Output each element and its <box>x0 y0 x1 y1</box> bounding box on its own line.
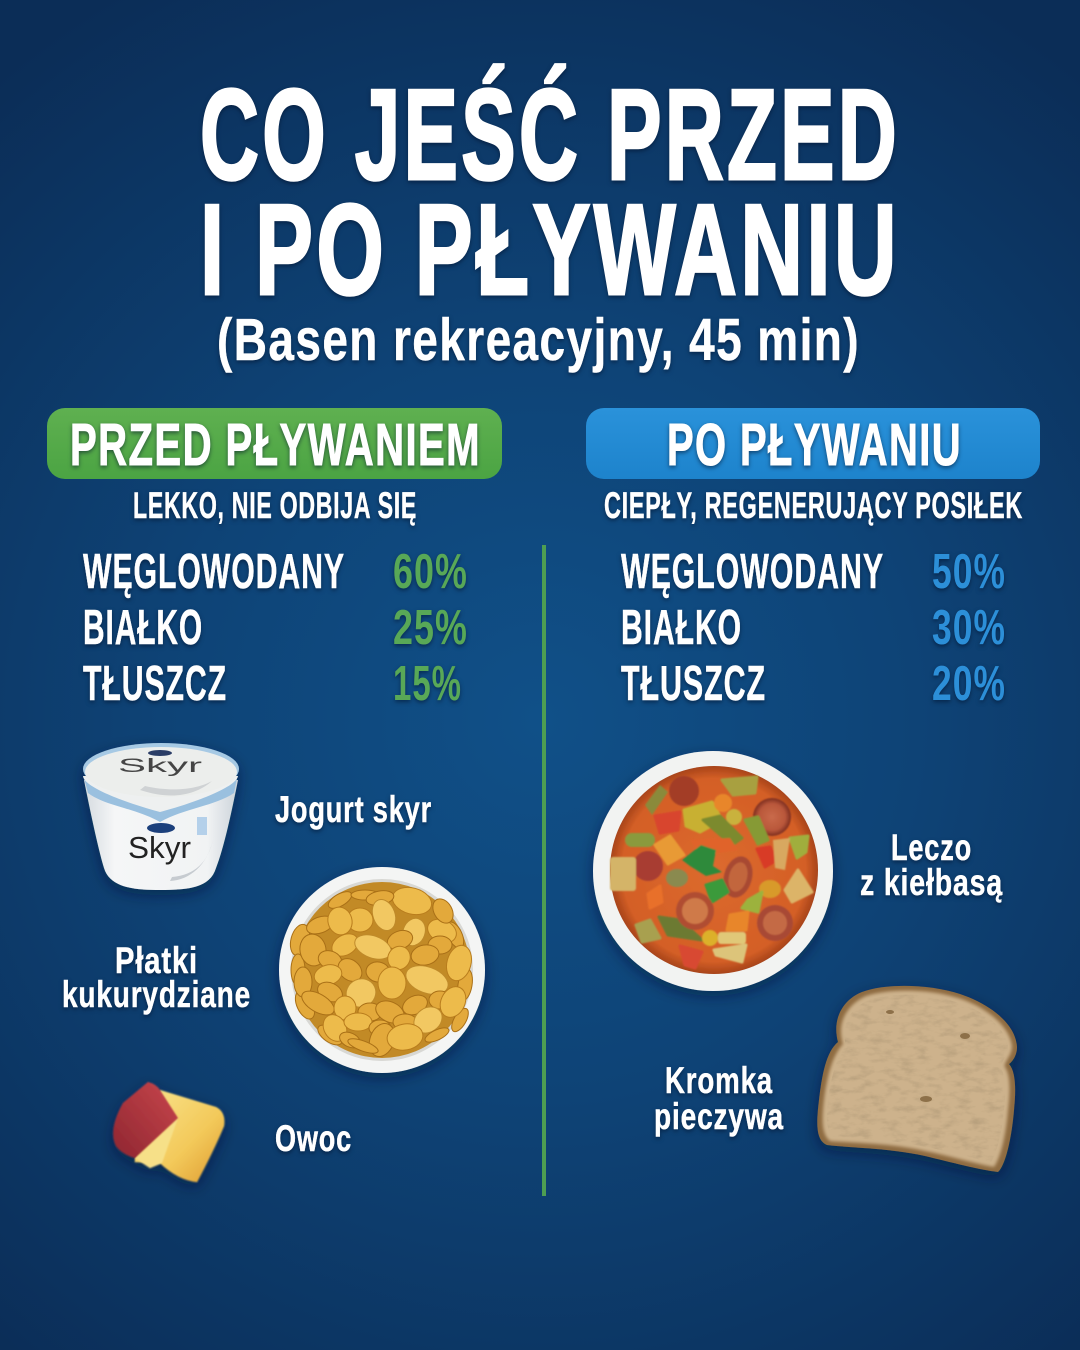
macros: before: BIAŁKO <box>83 601 203 655</box>
label: płatki kukurydziane <box>62 940 251 1015</box>
macros: after: BIAŁKO <box>621 601 742 655</box>
macros: after: 20% <box>932 657 1006 711</box>
subtitle: (Basen rekreacyjny, 45 min) <box>217 307 860 373</box>
macros: before <box>83 545 468 711</box>
title <box>200 63 900 322</box>
label: leczo z kiełbasą: z kiełbasą <box>860 862 1003 903</box>
label: płatki kukurydziane: kukurydziane <box>62 974 251 1015</box>
macros: before: 60% <box>393 545 468 599</box>
icon: bread slice <box>817 986 1017 1172</box>
label: płatki kukurydziane: Płatki <box>115 940 198 981</box>
label: kromka pieczywa: pieczywa <box>654 1096 784 1137</box>
icon: skyr yogurt: Skyr <box>118 756 203 777</box>
label: jogurt skyr: Jogurt skyr <box>275 789 432 830</box>
label: owoc: Owoc <box>275 1118 352 1159</box>
macros: after: TŁUSZCZ <box>621 657 766 711</box>
subheading: before: LEKKO, NIE ODBIJA SIĘ <box>133 485 417 526</box>
divider <box>542 545 546 1196</box>
label: kromka pieczywa <box>654 1060 784 1137</box>
icon: fruit <box>113 1082 224 1182</box>
macros: before: 25% <box>393 601 468 655</box>
icon: skyr yogurt: Skyr <box>128 830 191 865</box>
macros: before: TŁUSZCZ <box>83 657 227 711</box>
macros: before: 15% <box>393 657 462 711</box>
heading pill: przed pływaniem: PRZED PŁYWANIEM <box>70 412 481 478</box>
macros: after: 50% <box>932 545 1006 599</box>
label: kromka pieczywa: Kromka <box>665 1060 773 1101</box>
heading pill: przed pływaniem <box>47 408 502 479</box>
icon: leczo bowl <box>593 751 833 991</box>
icon: skyr yogurt <box>83 743 239 890</box>
label: leczo z kiełbasą: Leczo <box>891 827 972 868</box>
label: leczo z kiełbasą <box>860 827 1003 903</box>
icon: corn flakes bowl <box>279 867 485 1073</box>
macros: after: WĘGLOWODANY <box>621 545 884 599</box>
macros: before: WĘGLOWODANY <box>83 545 345 599</box>
macros: after <box>621 545 1006 711</box>
macros: after: 30% <box>932 601 1006 655</box>
panel: before swimming <box>47 408 502 1182</box>
panel: after swimming <box>586 408 1040 1172</box>
